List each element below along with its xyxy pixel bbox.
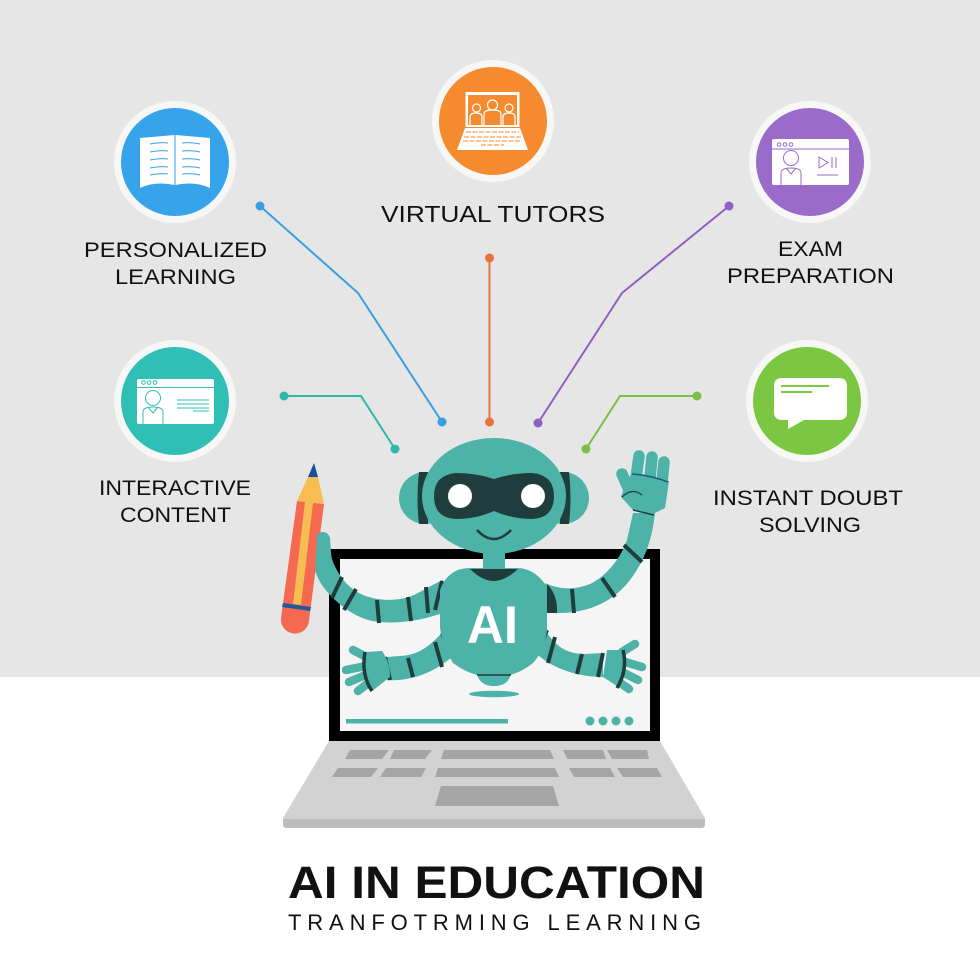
- robot head: [399, 438, 589, 554]
- label: personalized learning: LEARNING: [115, 266, 236, 289]
- icon: open book: [114, 101, 236, 223]
- laptop base: [283, 741, 705, 828]
- laptop screen: [329, 549, 660, 741]
- icon: chat bubble: [746, 340, 868, 462]
- label: virtual tutors: VIRTUAL TUTORS: [381, 201, 605, 227]
- connector: personalized learning: [256, 202, 446, 426]
- label: interactive content: INTERACTIVE: [99, 477, 251, 500]
- label: personalized learning: PERSONALIZED: [84, 239, 267, 262]
- label: exam preparation: [727, 238, 894, 288]
- lower left hand: [346, 650, 390, 691]
- connector: interactive content: [280, 392, 400, 454]
- icon: video lesson window: [749, 101, 871, 223]
- label: instant doubt solving: INSTANT DOUBT: [713, 487, 903, 510]
- title: AI IN EDUCATION: [288, 857, 705, 908]
- raised hand: [621, 456, 669, 515]
- label: instant doubt solving: SOLVING: [759, 514, 861, 537]
- label: exam preparation: EXAM: [778, 238, 843, 261]
- label: personalized learning: [84, 239, 267, 289]
- robot neck: [483, 550, 505, 574]
- robot: [315, 438, 669, 697]
- label: interactive content: [99, 477, 251, 527]
- label: interactive content: CONTENT: [120, 504, 231, 527]
- connector: exam preparation: [534, 202, 734, 428]
- icon: laptop with tutors: [432, 60, 554, 182]
- subtitle: TRANFOTRMING LEARNING: [288, 910, 701, 935]
- laptop: [283, 549, 705, 828]
- robot arms: [315, 513, 655, 680]
- robot body: [440, 568, 557, 697]
- label: instant doubt solving: [713, 487, 903, 537]
- label: exam preparation: PREPARATION: [727, 265, 894, 288]
- pencil: [281, 463, 324, 634]
- icon: profile window: [114, 340, 236, 462]
- connector: instant doubt solving: [582, 392, 702, 454]
- robot body: AI: [467, 596, 518, 655]
- connector: virtual tutors: [485, 254, 494, 426]
- lower right hand: [603, 644, 642, 689]
